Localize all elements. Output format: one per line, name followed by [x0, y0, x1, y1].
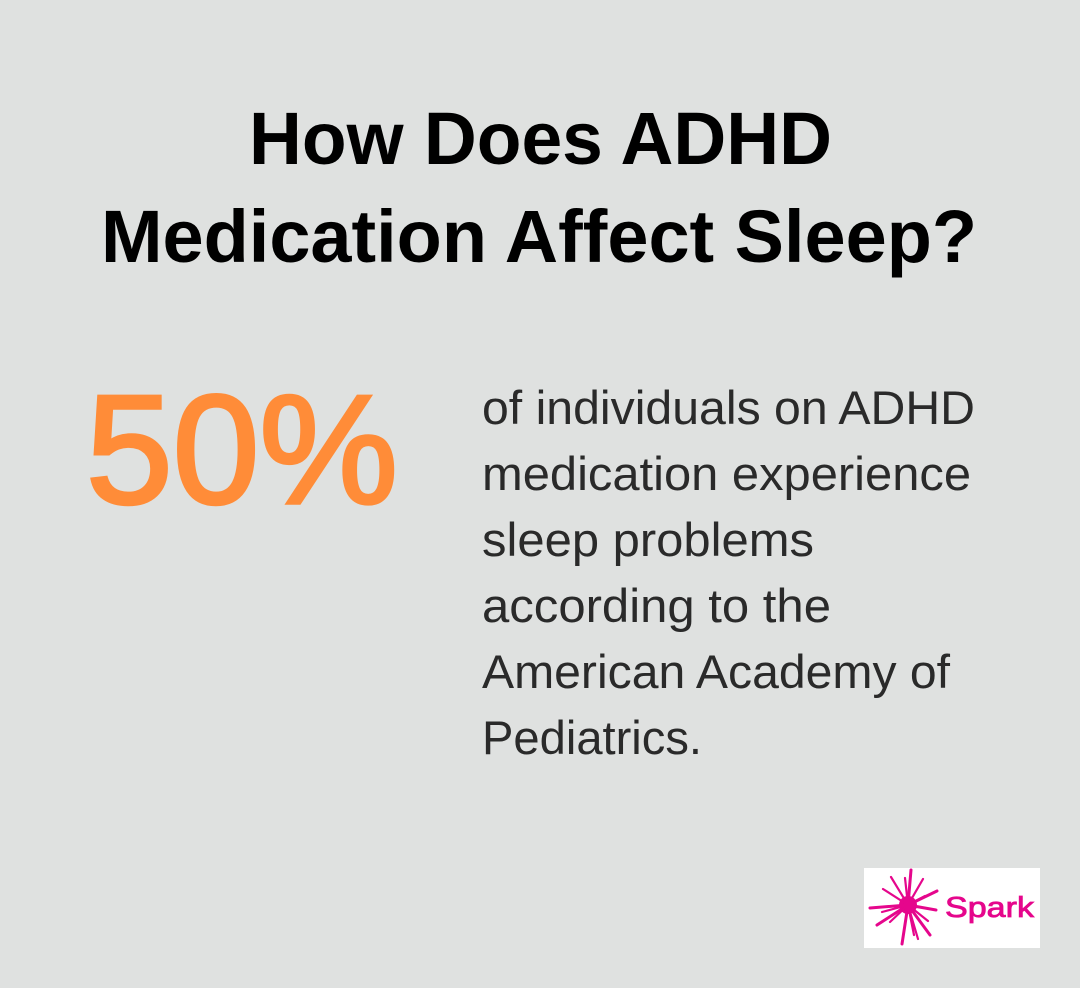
statistic description: American Academy of [482, 645, 951, 698]
title: How Does ADHD [249, 97, 832, 180]
title [101, 97, 977, 278]
statistic description: medication experience [482, 447, 971, 500]
big statistic: 50%: 50% [86, 363, 398, 536]
logo wordmark: Spark [945, 892, 1035, 924]
statistic description: of individuals on ADHD [482, 381, 975, 434]
icon: starburst [870, 870, 937, 944]
logo: Spark [864, 868, 1040, 948]
statistic description: according to the [482, 579, 831, 632]
statistic description: sleep problems [482, 513, 814, 566]
title: Medication Affect Sleep? [101, 195, 977, 278]
statistic description [482, 381, 975, 764]
statistic description: Pediatrics. [482, 711, 702, 764]
